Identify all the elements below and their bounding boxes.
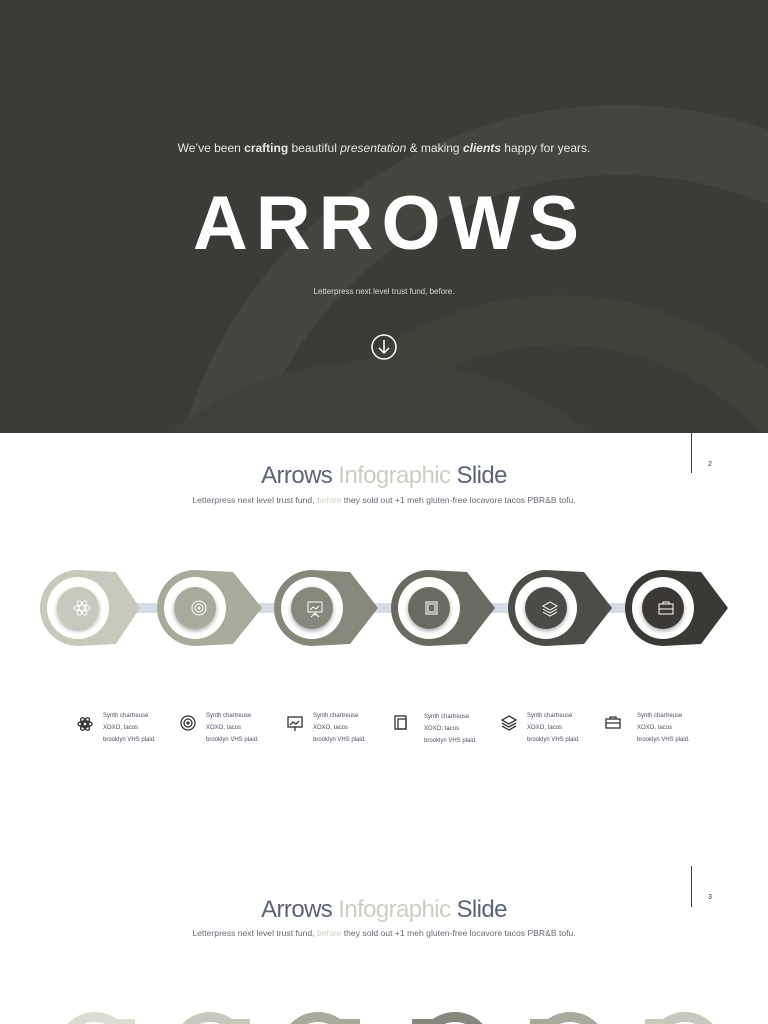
slide 3 title: Arrows Infographic Slide bbox=[261, 896, 507, 923]
labels row: Synth chartreuse bbox=[103, 713, 148, 719]
slide 3 shapes (cut off) bbox=[68, 1012, 712, 1024]
labels row: XOXO, tacos bbox=[424, 726, 459, 732]
text: 3 bbox=[708, 894, 712, 901]
labels row: Synth chartreuse bbox=[206, 713, 251, 719]
icon: down arrow bbox=[371, 334, 397, 360]
labels row: XOXO, tacos bbox=[206, 725, 241, 731]
page number 2 bbox=[691, 433, 692, 473]
hero title: ARROWS bbox=[193, 181, 587, 266]
arrows chart bbox=[40, 570, 728, 646]
hero panel bbox=[0, 0, 768, 433]
tagline: We’ve been crafting beautiful presentation & making clients happy for years. bbox=[178, 141, 590, 155]
labels row: Synth chartreuse bbox=[424, 714, 469, 720]
labels row: Synth chartreuse bbox=[527, 713, 572, 719]
text: 2 bbox=[708, 461, 712, 468]
slide 2 subtitle: Letterpress next level trust fund, before they sold out +1 meh gluten-free locavore tacos PBR&B tofu. bbox=[192, 495, 576, 505]
labels row: brooklyn VHS plaid. bbox=[527, 737, 580, 743]
labels row: brooklyn VHS plaid. bbox=[103, 737, 156, 743]
labels row: brooklyn VHS plaid. bbox=[424, 738, 477, 744]
labels row: Synth chartreuse bbox=[637, 713, 682, 719]
slide 3 subtitle: Letterpress next level trust fund, before they sold out +1 meh gluten-free locavore tacos PBR&B tofu. bbox=[192, 928, 576, 938]
page number 3 bbox=[691, 866, 692, 907]
hero subtitle: Letterpress next level trust fund, before. bbox=[314, 287, 454, 296]
labels row: brooklyn VHS plaid. bbox=[206, 737, 259, 743]
slide 2 title: Arrows Infographic Slide bbox=[261, 462, 507, 489]
labels row: Synth chartreuse bbox=[313, 713, 358, 719]
labels row: XOXO, tacos bbox=[527, 725, 562, 731]
labels row: brooklyn VHS plaid. bbox=[313, 737, 366, 743]
labels row: XOXO, tacos bbox=[637, 725, 672, 731]
labels row bbox=[77, 712, 690, 744]
labels row: XOXO, tacos bbox=[313, 725, 348, 731]
labels row: XOXO, tacos bbox=[103, 725, 138, 731]
labels row: brooklyn VHS plaid. bbox=[637, 737, 690, 743]
